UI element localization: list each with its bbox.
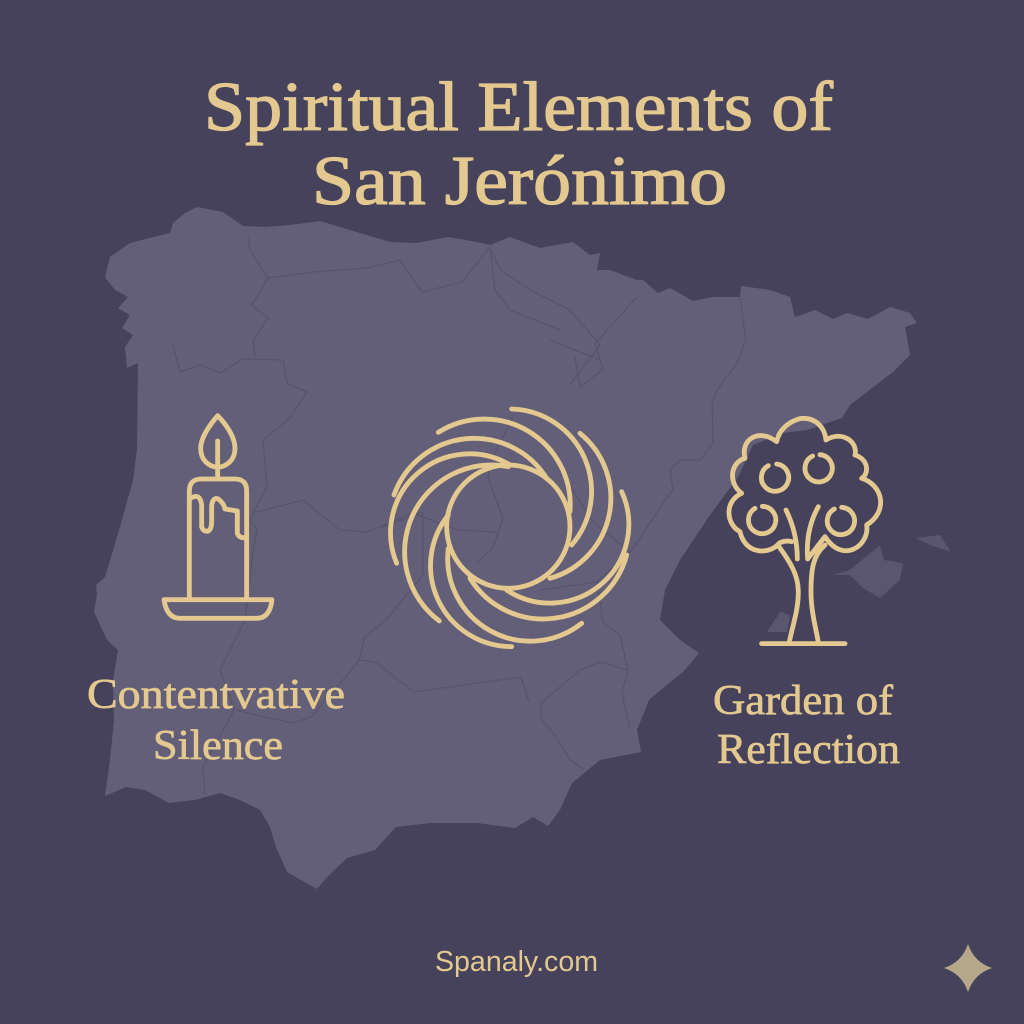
map: Iberian Peninsula [94,207,951,889]
icon: four-point star [944,944,992,992]
label: Contemplative Silence [87,672,345,769]
title: Spiritual Elements of [204,69,834,146]
icon: candle [164,416,272,618]
label: Garden of Reflection: Garden of [713,678,893,724]
label: Garden of Reflection: Reflection [717,727,900,773]
label: Garden of Reflection [713,678,900,773]
icon: central spiral [391,409,629,647]
footer: website: Spanaly.com [435,946,598,978]
label: Contemplative Silence: Contentvative [87,672,345,718]
title [204,69,834,220]
icon: fruit tree [729,418,881,644]
label: Contemplative Silence: Silence [153,723,283,769]
title: San Jerónimo [312,143,727,220]
